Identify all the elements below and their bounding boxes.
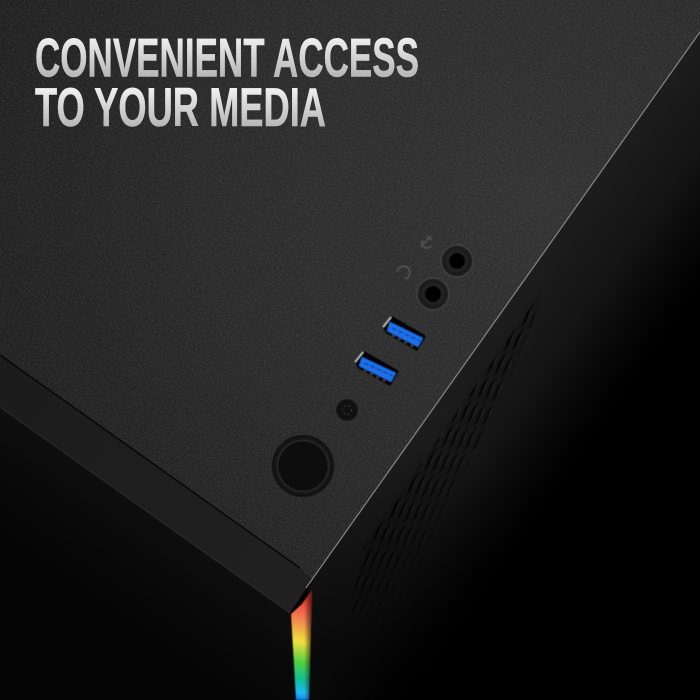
audio jack: microphone [441,245,473,277]
USB port: upper [383,316,426,351]
vent slots [356,302,536,593]
reset button [336,400,358,420]
panel: case lower bevel [0,355,312,613]
icon: headphones [397,266,410,279]
bright top edge [306,32,700,588]
panel: case side with vents [308,32,700,700]
icon: microphone [421,236,432,248]
RGB light strip [291,590,312,700]
power button [273,436,333,496]
audio jack: headphones [417,278,449,310]
panel: case front [0,407,296,700]
bevel seam [0,355,300,568]
title: TO YOUR MEDIA [35,76,326,138]
title [35,26,419,138]
USB port: lower [355,351,399,386]
title: CONVENIENT ACCESS [35,26,419,88]
